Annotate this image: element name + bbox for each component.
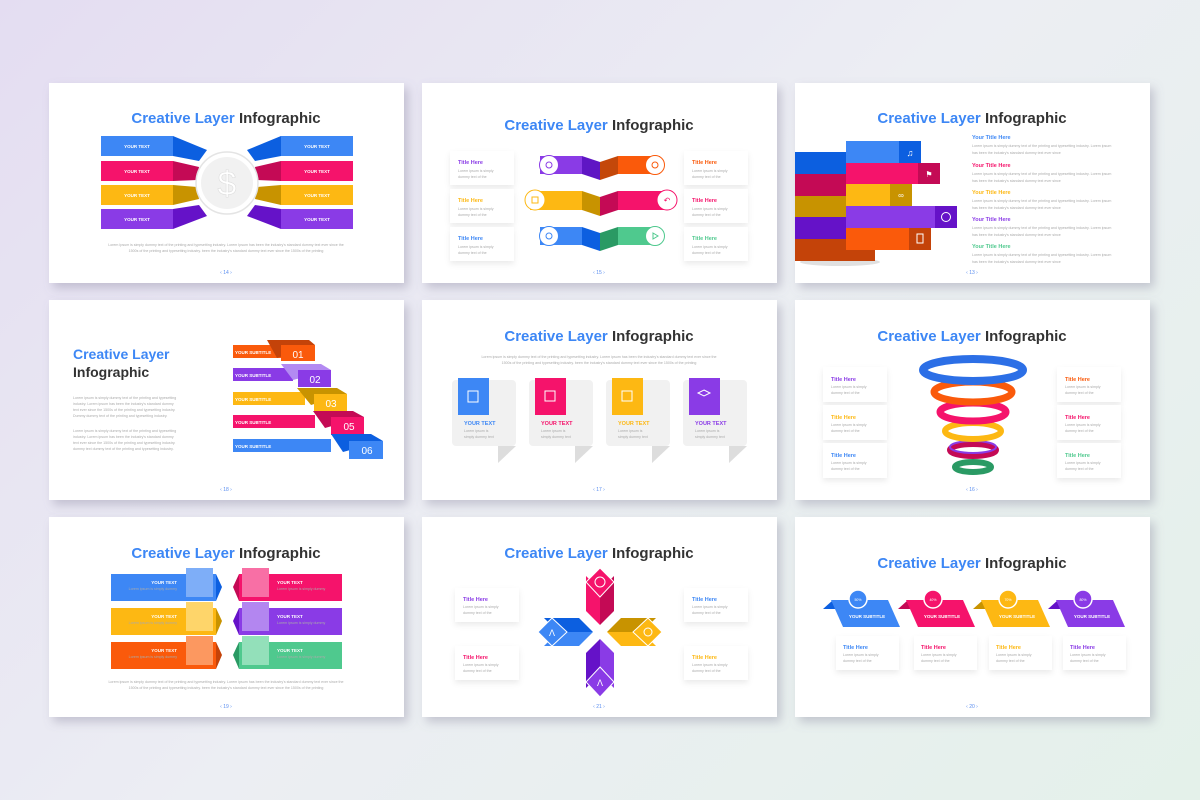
cards: YOUR TEXT — [618, 421, 650, 427]
right bars: YOUR TEXT — [304, 193, 330, 198]
text list: Your Title Here — [972, 135, 1011, 141]
body text: text ever since the 1500s of the printing and typesetting industry. — [73, 441, 175, 445]
left cards: dummy text of the — [831, 429, 860, 433]
body text: text ever since the 1500s of the printing and typesetting industry. — [73, 408, 175, 412]
ribbon row 2: ↶ — [664, 196, 671, 205]
right cards: Title Here — [692, 198, 717, 204]
description: Lorem ipsum is simply dummy text of the printing and typesetting industry. Lorem ipsum has been the industry's standard dummy text ever since the — [481, 355, 717, 359]
steps: YOUR SUBTITLE — [235, 397, 271, 402]
right bars: YOUR TEXT — [277, 580, 303, 585]
left bars — [111, 568, 222, 669]
cards: simply dummy text — [618, 435, 648, 439]
step shapes: 40% — [929, 598, 937, 602]
right cards: dummy text of the — [692, 175, 721, 179]
title: Creative Layer Infographic — [131, 545, 321, 562]
slide 17: tab cards — [422, 300, 777, 500]
ribbon row 1 — [540, 156, 664, 180]
cards: dummy text of the — [1070, 659, 1099, 663]
ribbon row 3 — [540, 226, 664, 251]
cards: dummy text of the — [921, 659, 950, 663]
slide 20: parallelogram steps — [795, 517, 1150, 717]
left cards: dummy text of the — [831, 391, 860, 395]
cards: Title Here — [843, 645, 868, 651]
right cards: Title Here — [692, 160, 717, 166]
title: Infographic — [73, 364, 149, 380]
right cards: dummy text of the — [1065, 467, 1094, 471]
step shapes: YOUR SUBTITLE — [999, 614, 1035, 619]
left cards: Title Here — [831, 377, 856, 383]
text list: Your Title Here — [972, 244, 1011, 250]
steps: YOUR SUBTITLE — [235, 373, 271, 378]
right cards: dummy text of the — [692, 669, 721, 673]
left bars: YOUR TEXT — [124, 217, 150, 222]
cards: YOUR TEXT — [695, 421, 727, 427]
front bars with icons — [846, 141, 957, 250]
text list: has been the industry's standard dummy text ever since — [972, 151, 1061, 155]
cards: Lorem ipsum is — [541, 429, 566, 433]
title: Creative Layer Infographic — [504, 328, 694, 345]
cards: simply dummy text — [464, 435, 494, 439]
slide 17: tab cards: 1500s of the printing and typesetting industry. been the industry's standard dummy text ever since the 1500s of the printing — [502, 361, 696, 365]
slide 13: stacked bars — [795, 83, 1150, 283]
left cards: Lorem ipsum is simply — [831, 385, 867, 389]
left cards: Title Here — [458, 236, 483, 242]
right cards: Title Here — [692, 655, 717, 661]
title: Creative Layer Infographic — [504, 545, 694, 562]
right bars: YOUR TEXT — [277, 648, 303, 653]
slide 14: money bow — [49, 83, 404, 283]
title: Creative Layer Infographic — [131, 110, 321, 127]
left bars: Lorem ipsum is simply dummy — [129, 655, 177, 659]
title: Creative Layer Infographic — [877, 328, 1067, 345]
right bars: Lorem ipsum is simply dummy — [277, 587, 326, 591]
text list — [972, 135, 1111, 264]
left cards — [455, 588, 519, 680]
steps: YOUR SUBTITLE — [235, 350, 271, 355]
front bars with icons: ♫ — [907, 148, 913, 158]
slide 19: arrow bars — [49, 517, 404, 717]
step shapes: 70% — [1004, 598, 1012, 602]
text list: Lorem ipsum is simply dummy text of the printing and typesetting industry. Lorem ipsum — [972, 199, 1111, 203]
steps: 03 — [325, 399, 337, 410]
cards: YOUR TEXT — [464, 421, 496, 427]
text list: Your Title Here — [972, 190, 1011, 196]
page number: ‹ 21 › — [593, 704, 605, 710]
left bars: YOUR TEXT — [151, 648, 177, 653]
page number: ‹ 18 › — [220, 487, 232, 493]
icon: dollar coin: $ — [218, 165, 237, 203]
cards: YOUR TEXT — [541, 421, 573, 427]
body text: industry. Lorem ipsum has been the industry's standard dummy — [73, 435, 174, 439]
page number: ‹ 20 › — [966, 704, 978, 710]
cards: simply dummy text — [541, 435, 571, 439]
cards: Title Here — [921, 645, 946, 651]
right cards: dummy text of the — [692, 213, 721, 217]
step shapes: YOUR SUBTITLE — [924, 614, 960, 619]
cards: dummy text of the — [843, 659, 872, 663]
right cards: Lorem ipsum is simply — [692, 207, 728, 211]
right cards: Lorem ipsum is simply — [1065, 461, 1101, 465]
right cards: dummy text of the — [1065, 391, 1094, 395]
cards: Title Here — [1070, 645, 1095, 651]
slide 19: arrow bars: 1500s of the printing and typesetting industry. been the industry's standard dummy text ever since the 1500s of the printing — [129, 686, 323, 690]
left cards: Title Here — [458, 160, 483, 166]
right cards: Lorem ipsum is simply — [692, 605, 728, 609]
left cards: dummy text of the — [458, 175, 487, 179]
left bars — [101, 136, 207, 229]
cards: Lorem ipsum is — [464, 429, 489, 433]
left cards: Title Here — [463, 655, 488, 661]
left bars: YOUR TEXT — [124, 144, 150, 149]
slide 18: staircase — [49, 300, 404, 500]
right cards: dummy text of the — [692, 251, 721, 255]
back bars — [795, 152, 880, 266]
page number: ‹ 17 › — [593, 487, 605, 493]
left cards: dummy text of the — [463, 669, 492, 673]
cards: dummy text of the — [996, 659, 1025, 663]
right cards: Lorem ipsum is simply — [692, 663, 728, 667]
text list: has been the industry's standard dummy text ever since — [972, 233, 1061, 237]
right bars: YOUR TEXT — [277, 614, 303, 619]
icon: dollar coin — [196, 152, 258, 214]
title: Creative Layer — [73, 346, 170, 362]
text list: Your Title Here — [972, 163, 1011, 169]
steps: 02 — [309, 375, 321, 386]
steps: YOUR SUBTITLE — [235, 420, 271, 425]
front bars with icons: ∞ — [898, 191, 904, 200]
left cards: Lorem ipsum is simply — [831, 423, 867, 427]
front bars with icons: ⚑ — [925, 170, 933, 179]
body text: Dummy dummy text of the printing and typesetting industry. — [73, 414, 167, 418]
cards: Lorem ipsum is — [695, 429, 720, 433]
left cards: Lorem ipsum is simply — [463, 663, 499, 667]
step shapes: 80% — [1079, 598, 1087, 602]
left cards — [450, 151, 514, 261]
body text: dummy text dummy text of the printing and typesetting industry. — [73, 447, 174, 451]
left bars: Lorem ipsum is simply dummy — [129, 587, 177, 591]
text list: has been the industry's standard dummy text ever since — [972, 179, 1061, 183]
cards — [836, 636, 1126, 670]
left cards: Lorem ipsum is simply — [831, 461, 867, 465]
right bars — [247, 136, 353, 229]
right bars: Lorem ipsum is simply dummy — [277, 655, 326, 659]
cards: Title Here — [996, 645, 1021, 651]
right cards: Title Here — [692, 236, 717, 242]
title: Creative Layer Infographic — [504, 117, 694, 134]
left cards: Lorem ipsum is simply — [463, 605, 499, 609]
right bars: YOUR TEXT — [304, 169, 330, 174]
page number: ‹ 15 › — [593, 270, 605, 276]
left cards: dummy text of the — [458, 213, 487, 217]
funnel rings — [923, 359, 1023, 472]
body text: industry. Lorem ipsum has been the industry's standard dummy — [73, 402, 174, 406]
left cards: Lorem ipsum is simply — [458, 245, 494, 249]
title — [73, 346, 170, 380]
slide 21: diamond cross — [422, 517, 777, 717]
text list: has been the industry's standard dummy text ever since — [972, 206, 1061, 210]
left bars: YOUR TEXT — [124, 169, 150, 174]
page number: ‹ 13 › — [966, 270, 978, 276]
slide 15: ribbons — [422, 83, 777, 283]
right cards: Title Here — [1065, 377, 1090, 383]
right cards: dummy text of the — [692, 611, 721, 615]
left cards: Lorem ipsum is simply — [458, 207, 494, 211]
cards: simply dummy text — [695, 435, 725, 439]
steps — [233, 340, 383, 459]
page number: ‹ 19 › — [220, 704, 232, 710]
right cards: Lorem ipsum is simply — [692, 245, 728, 249]
left cards: Title Here — [831, 453, 856, 459]
text list: Lorem ipsum is simply dummy text of the printing and typesetting industry. Lorem ipsum — [972, 253, 1111, 257]
text list: Lorem ipsum is simply dummy text of the printing and typesetting industry. Lorem ipsum — [972, 144, 1111, 148]
steps: 05 — [343, 422, 355, 433]
cards — [452, 378, 747, 463]
right cards — [684, 588, 748, 680]
title: Creative Layer Infographic — [877, 110, 1067, 127]
left cards — [823, 367, 887, 478]
step shapes — [823, 590, 1125, 627]
right cards: Lorem ipsum is simply — [692, 169, 728, 173]
right bars: YOUR TEXT — [304, 144, 330, 149]
steps: 01 — [292, 350, 304, 361]
left bars: YOUR TEXT — [151, 614, 177, 619]
diamond cross: Λ — [549, 628, 555, 638]
right cards: Lorem ipsum is simply — [1065, 423, 1101, 427]
ribbon row 2 — [525, 190, 677, 216]
page number: ‹ 14 › — [220, 270, 232, 276]
text list: Your Title Here — [972, 217, 1011, 223]
left bars: YOUR TEXT — [151, 580, 177, 585]
left bars: YOUR TEXT — [124, 193, 150, 198]
diamond cross: Λ — [597, 678, 603, 688]
body text: Lorem ipsum is simply dummy text of the printing and typesetting — [73, 429, 176, 433]
right cards — [1057, 367, 1121, 478]
left cards: dummy text of the — [831, 467, 860, 471]
left cards: Title Here — [458, 198, 483, 204]
cards: Lorem ipsum is simply — [843, 653, 879, 657]
diamond cross — [538, 568, 662, 697]
right bars — [233, 568, 342, 669]
right cards: dummy text of the — [1065, 429, 1094, 433]
right cards: Lorem ipsum is simply — [1065, 385, 1101, 389]
step shapes: 50% — [854, 598, 862, 602]
cards: Lorem ipsum is simply — [1070, 653, 1106, 657]
text list: Lorem ipsum is simply dummy text of the printing and typesetting industry. Lorem ipsum — [972, 172, 1111, 176]
left cards: dummy text of the — [458, 251, 487, 255]
step shapes: YOUR SUBTITLE — [1074, 614, 1110, 619]
left cards: Lorem ipsum is simply — [458, 169, 494, 173]
left cards: Title Here — [831, 415, 856, 421]
slide 16: funnel rings — [795, 300, 1150, 500]
description: Lorem Ipsum is simply dummy text of the printing and typesetting industry. Lorem Ipsum has been the industry's standard dummy text ever since the — [108, 243, 344, 247]
steps: YOUR SUBTITLE — [235, 444, 271, 449]
steps: 06 — [361, 446, 373, 457]
body text — [73, 396, 176, 451]
left bars: Lorem ipsum is simply dummy — [129, 621, 177, 625]
left cards: dummy text of the — [463, 611, 492, 615]
page number: ‹ 16 › — [966, 487, 978, 493]
text list: Lorem ipsum is simply dummy text of the printing and typesetting industry. Lorem ipsum — [972, 226, 1111, 230]
right cards — [684, 151, 748, 261]
right bars: YOUR TEXT — [304, 217, 330, 222]
right cards: Title Here — [1065, 415, 1090, 421]
cards: Lorem ipsum is simply — [996, 653, 1032, 657]
right cards: Title Here — [1065, 453, 1090, 459]
title: Creative Layer Infographic — [877, 555, 1067, 572]
slide 14: money bow: 1500s of the printing and typesetting industry. been the industry's standard dummy text ever since the 1500s of the printing — [129, 249, 323, 253]
body text: Lorem ipsum is simply dummy text of the printing and typesetting — [73, 396, 176, 400]
right bars: Lorem ipsum is simply dummy — [277, 621, 326, 625]
text list: has been the industry's standard dummy text ever since — [972, 260, 1061, 264]
step shapes: YOUR SUBTITLE — [849, 614, 885, 619]
description: Lorem ipsum is simply dummy text of the printing and typesetting industry. Lorem ipsum has been the industry's standard dummy text ever since the — [108, 680, 344, 684]
cards: Lorem ipsum is simply — [921, 653, 957, 657]
left cards: Title Here — [463, 597, 488, 603]
right cards: Title Here — [692, 597, 717, 603]
cards: Lorem ipsum is — [618, 429, 643, 433]
